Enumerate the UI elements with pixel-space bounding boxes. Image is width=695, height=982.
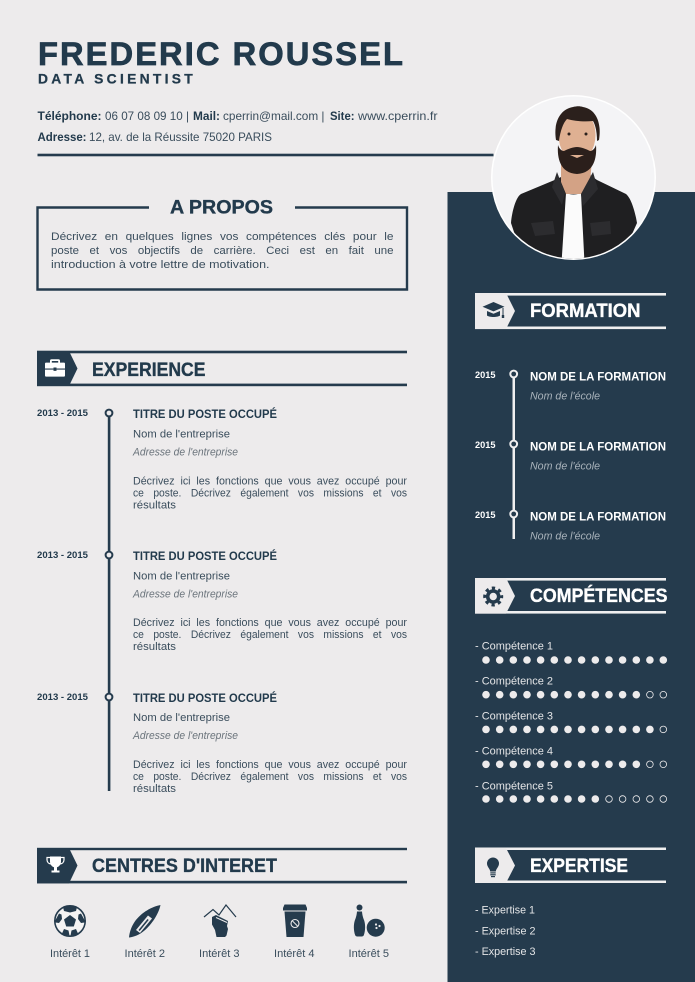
experience entry 1: résultats: [133, 500, 177, 512]
about text: introduction à votre lettre de motivation.: [51, 259, 270, 271]
experience entry 2: 2013 - 2015: [37, 550, 88, 560]
icon: briefcase: [45, 359, 65, 377]
interest 2: surfboard: Intérêt 2: [124, 948, 165, 960]
icon: graduation cap: [482, 302, 504, 318]
experience entry 3: résultats: [133, 783, 177, 795]
experience entry 2: Nom de l'entreprise: [133, 570, 230, 582]
experience entry 1: 2013 - 2015: [37, 408, 88, 418]
expertise list: - Expertise 3: [475, 946, 536, 958]
interest 3: climbing: Intérêt 3: [199, 948, 240, 960]
header: name and job title: [38, 36, 405, 86]
interest 1: football: Intérêt 1: [50, 948, 90, 960]
formation entry 1: NOM DE LA FORMATION: [530, 372, 666, 384]
skill 5: - Compétence 5: [475, 780, 553, 792]
experience entry 3: Adresse de l'entreprise: [132, 730, 238, 742]
section heading: skills: [475, 578, 668, 614]
experience entry 3: [37, 690, 407, 795]
formation entry 1: [475, 370, 666, 402]
about text: poste et vos objectifs de carrière. Ceci est en fait une: [51, 245, 394, 257]
experience entry 2: ce poste. Décrivez également vos missions et vos: [133, 629, 407, 641]
experience entry 2: Adresse de l'entreprise: [132, 588, 238, 600]
interest 2: surfboard: [124, 905, 165, 960]
panel: right sidebar background: [448, 192, 695, 982]
heading text: CENTRES D'INTERET: [92, 856, 277, 877]
contact details: 12, av. de la Réussite 75020 PARIS: [89, 130, 272, 144]
expertise list: - Expertise 2: [475, 926, 536, 938]
experience timeline line: [106, 410, 112, 791]
interest 3: climbing: [199, 905, 240, 960]
skill 1: - Compétence 1: [475, 640, 553, 652]
interest 5: bowling: [348, 904, 389, 960]
contact details: Adresse:: [38, 130, 86, 144]
formation entry 3: Nom de l'école: [530, 530, 600, 542]
heading text: COMPÉTENCES: [530, 585, 668, 607]
heading text: EXPERIENCE: [92, 360, 206, 381]
skill 3: - Compétence 3: [475, 710, 553, 722]
skill 2: [475, 676, 667, 698]
experience entry 1: TITRE DU POSTE OCCUPÉ: [133, 406, 277, 421]
job title: DATA SCIENTIST: [38, 72, 196, 86]
experience entry 1: [37, 406, 407, 512]
experience entry 2: résultats: [133, 641, 177, 653]
experience entry 3: TITRE DU POSTE OCCUPÉ: [133, 690, 277, 705]
formation entry 2: NOM DE LA FORMATION: [530, 442, 666, 454]
name: FREDERIC ROUSSEL: [38, 36, 405, 72]
interest 1: football: [50, 906, 90, 960]
interest 4: coffee: [274, 904, 314, 960]
section heading: expertise: [475, 848, 666, 883]
experience entry 3: ce poste. Décrivez également vos missions et vos: [133, 771, 407, 783]
formation timeline line: [510, 371, 517, 539]
formation entry 3: NOM DE LA FORMATION: [530, 512, 666, 524]
icon: coffee cup: [283, 904, 307, 937]
skill 4: [475, 746, 667, 768]
experience entry 3: Nom de l'entreprise: [133, 712, 230, 724]
expertise list: [475, 904, 536, 958]
skill 4: - Compétence 4: [475, 746, 553, 758]
experience entry 1: ce poste. Décrivez également vos missions et vos: [133, 488, 407, 500]
contact details: [38, 109, 438, 144]
formation entry 2: [475, 440, 666, 472]
formation entry 3: [475, 510, 666, 542]
contact details: Téléphone:: [38, 109, 102, 123]
heading text: EXPERTISE: [530, 856, 628, 877]
experience entry 1: Adresse de l'entreprise: [132, 446, 238, 458]
portrait photo: [491, 95, 656, 268]
contact details: Mail:: [193, 109, 220, 123]
skill 2: - Compétence 2: [475, 676, 553, 688]
icon: hand and mountains: [204, 905, 236, 937]
experience entry 3: Décrivez ici les fonctions que vous avez occupé pour: [133, 759, 407, 771]
experience entry 2: TITRE DU POSTE OCCUPÉ: [133, 548, 277, 563]
icon: surfboard: [129, 905, 160, 938]
panel: about: [38, 196, 407, 290]
contact details: 06 07 08 09 10 |: [105, 109, 189, 123]
skill 5: [475, 780, 667, 803]
interest 5: bowling: Intérêt 5: [348, 948, 389, 960]
icon: gear: [485, 588, 502, 605]
formation entry 3: 2015: [475, 510, 496, 520]
experience entry 2: [37, 548, 407, 653]
expertise list: - Expertise 1: [475, 904, 535, 916]
icon: football: [55, 906, 85, 936]
interest 4: coffee: Intérêt 4: [274, 948, 314, 960]
heading: about: A PROPOS: [170, 196, 273, 218]
icon: light bulb: [487, 858, 499, 877]
formation entry 1: 2015: [475, 370, 496, 380]
experience entry 1: Nom de l'entreprise: [133, 428, 230, 440]
experience entry 3: 2013 - 2015: [37, 692, 88, 702]
contact details: Site:: [330, 109, 354, 123]
about text: Décrivez en quelques lignes vos compétences clés pour le: [51, 231, 394, 243]
experience entry 2: Décrivez ici les fonctions que vous avez occupé pour: [133, 617, 407, 629]
formation entry 1: Nom de l'école: [530, 390, 600, 402]
heading text: FORMATION: [530, 301, 640, 322]
contact details: www.cperrin.fr: [357, 109, 438, 123]
skill 1: [475, 640, 667, 664]
formation entry 2: Nom de l'école: [530, 460, 600, 472]
experience entry 1: Décrivez ici les fonctions que vous avez occupé pour: [133, 476, 407, 488]
section heading: formation: [475, 293, 666, 329]
skill 3: [475, 710, 667, 733]
formation entry 2: 2015: [475, 440, 496, 450]
icon: bowling pin and ball: [354, 904, 385, 937]
contact details: cperrin@mail.com |: [223, 109, 324, 123]
icon: trophy: [47, 856, 64, 872]
section heading: interests: [37, 848, 407, 883]
about text: [51, 231, 394, 271]
section heading: experience: [37, 351, 407, 386]
